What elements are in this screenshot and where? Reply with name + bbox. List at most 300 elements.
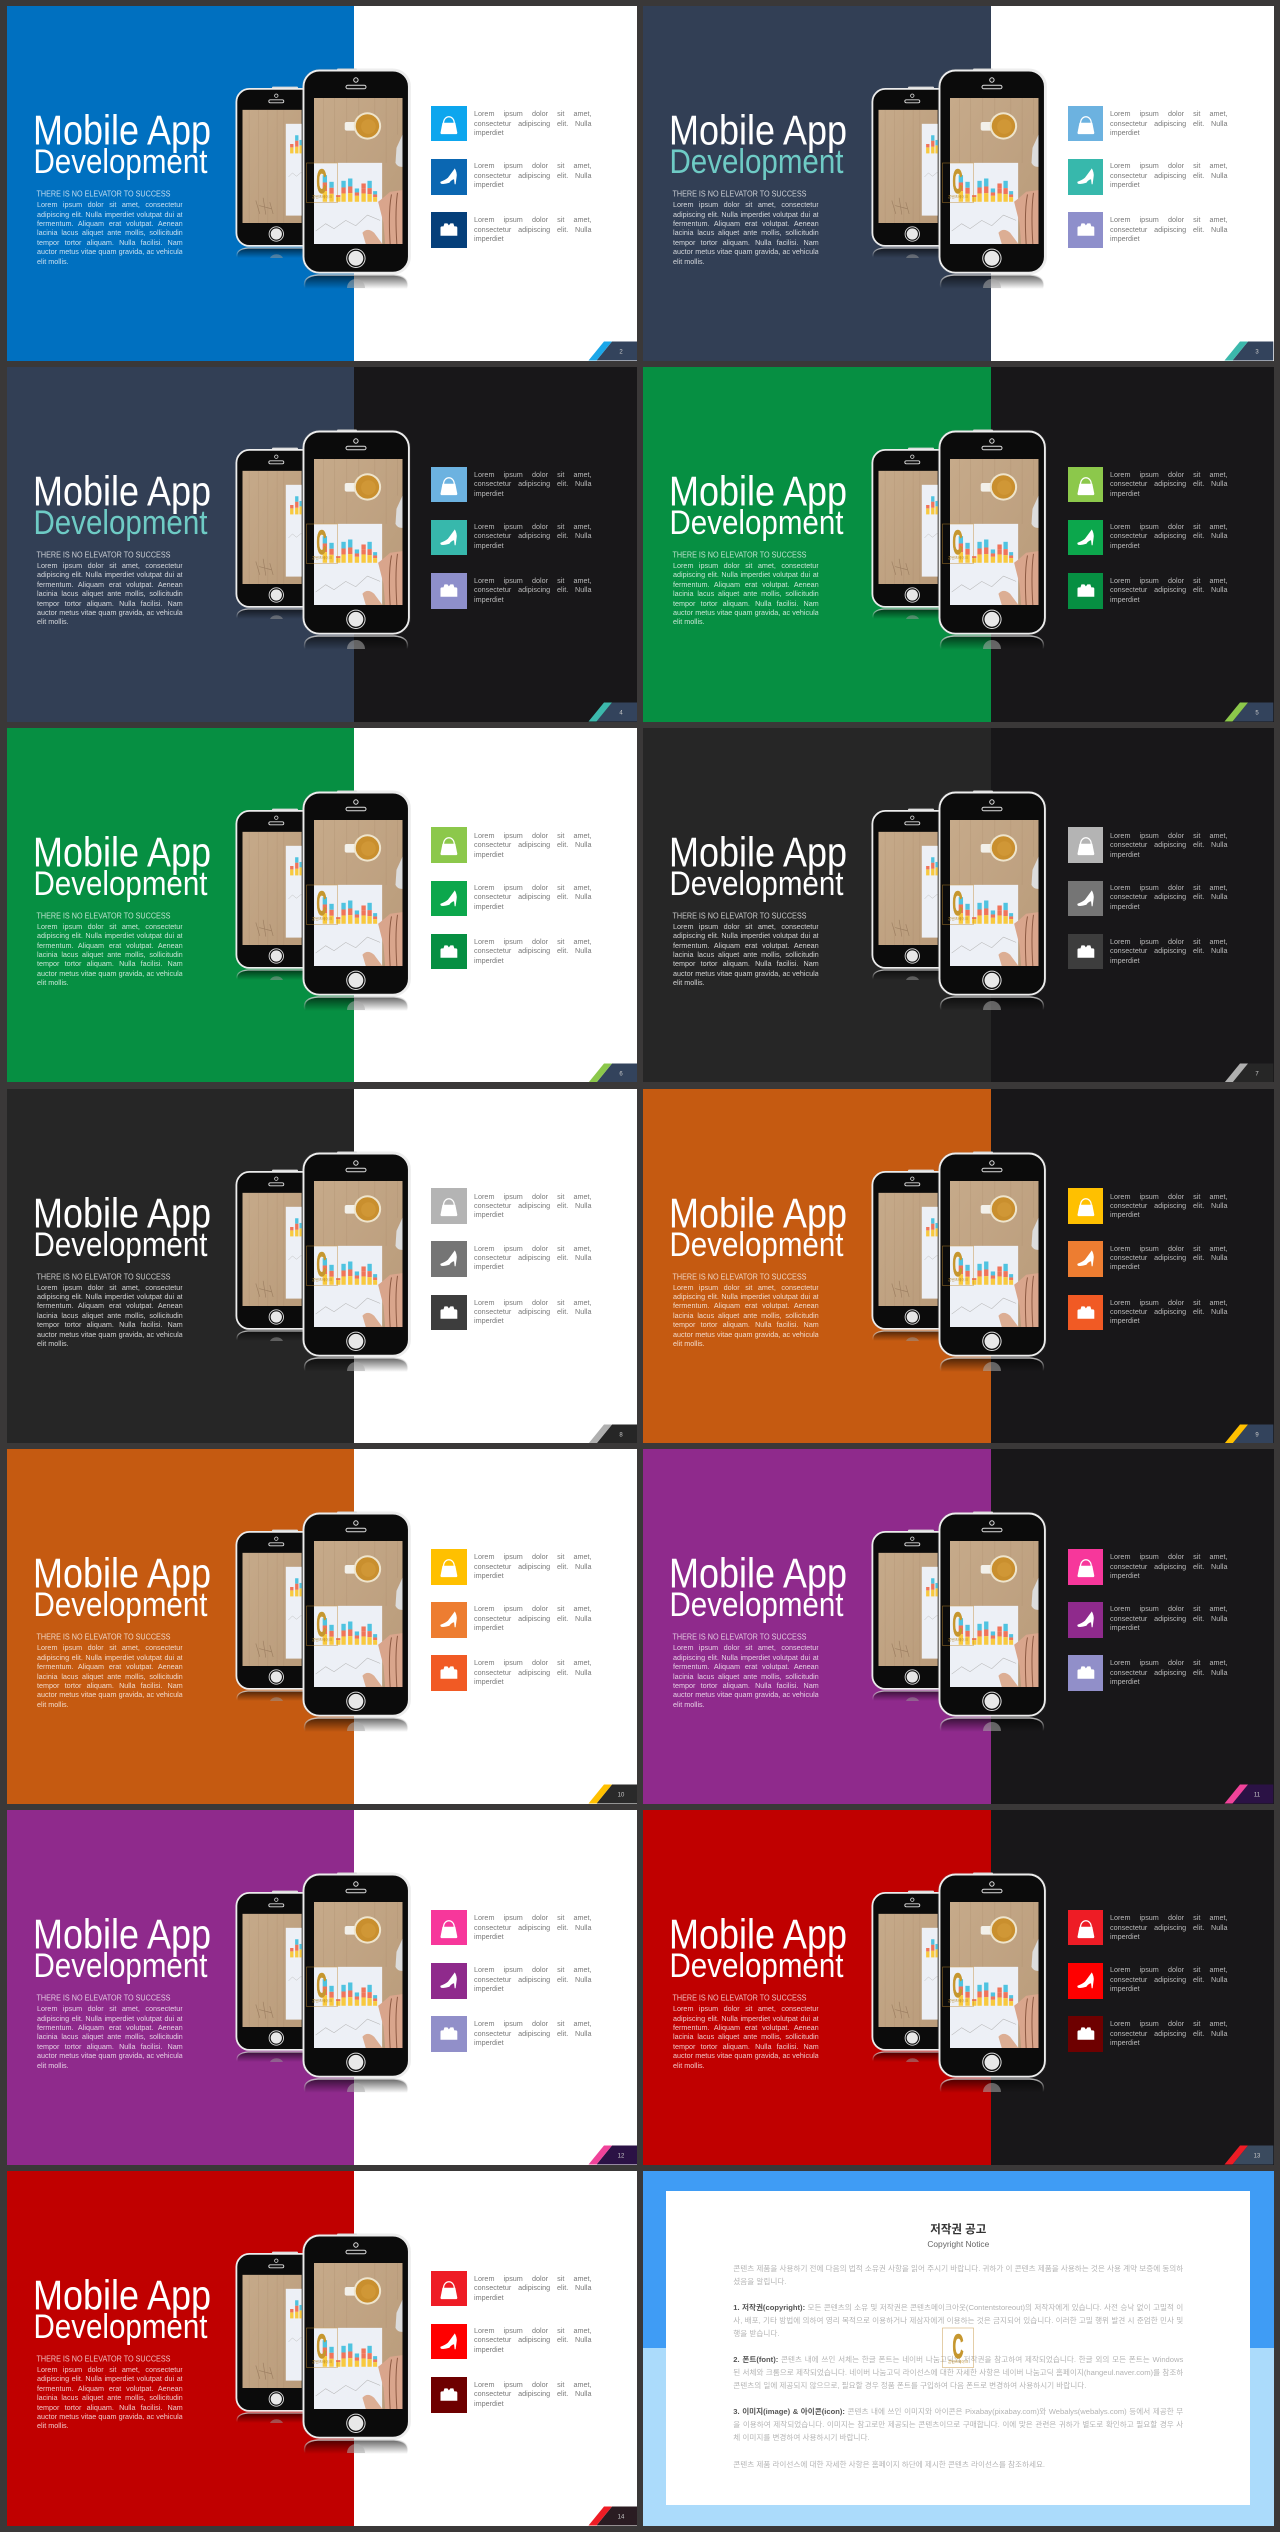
feature text 2 bbox=[1110, 161, 1228, 189]
feature text 2: imperdiet bbox=[1110, 902, 1140, 911]
page corner bbox=[643, 1089, 1274, 1443]
body paragraph: Lorem ipsum dolor sit amet, consectetur bbox=[673, 1283, 819, 1292]
body paragraph: elit mollis. bbox=[37, 2061, 68, 2070]
watermark bbox=[643, 1810, 1274, 2165]
icon: bag bbox=[431, 467, 467, 502]
title: THERE IS NO ELEVATOR TO SUCCESS bbox=[673, 1272, 807, 1281]
title bbox=[32, 107, 210, 199]
watermark: 콘텐츠메이크 bbox=[948, 1277, 969, 1282]
feature text 3: Lorem ipsum dolor sit amet, bbox=[474, 1298, 591, 1307]
page corner: 11 bbox=[1254, 1793, 1261, 1799]
icon: bag bbox=[1068, 1188, 1103, 1224]
feature text 2: Lorem ipsum dolor sit amet, bbox=[1110, 883, 1228, 892]
body paragraph: tempor tortor aliquam. Nulla facilisi. Nam bbox=[37, 1320, 182, 1329]
body paragraph: adipiscing elit. Nulla imperdiet volutpat dui at bbox=[37, 1653, 182, 1662]
watermark: 콘텐츠메이크 bbox=[312, 555, 332, 560]
body paragraph: elit mollis. bbox=[37, 2421, 68, 2430]
feature text 1: imperdiet bbox=[1110, 1932, 1140, 1941]
notice body text: 행을 받습니다. bbox=[733, 2329, 779, 2338]
body paragraph: lacinia lacus aliquet ante mollis, sollicitudin bbox=[673, 228, 819, 237]
body paragraph: Lorem ipsum dolor sit amet, consectetur bbox=[37, 1643, 182, 1652]
icon: bag bbox=[431, 1910, 467, 1945]
body paragraph: fermentum. Aliquam erat volutpat. Aenean bbox=[37, 219, 182, 228]
body paragraph: lacinia lacus aliquet ante mollis, sollicitudin bbox=[37, 1311, 182, 1320]
right panel bbox=[354, 1810, 637, 2165]
white notice card bbox=[666, 2191, 1250, 2505]
page corner bbox=[6, 1810, 637, 2165]
notice heading: 저작권 공고 bbox=[930, 2224, 986, 2236]
body paragraph: auctor metus vitae quam gravida, ac vehicula bbox=[673, 247, 819, 256]
watermark: C bbox=[316, 1606, 326, 1644]
feature text 1: Lorem ipsum dolor sit amet, bbox=[474, 1552, 591, 1561]
watermark: 콘텐츠메이크 bbox=[948, 194, 969, 199]
icon: gift bbox=[431, 1295, 467, 1330]
watermark: C bbox=[953, 1967, 963, 2005]
title: Mobile App bbox=[32, 107, 210, 154]
feature text 3 bbox=[474, 1298, 591, 1326]
feature text 1: imperdiet bbox=[1110, 1571, 1140, 1580]
feature text 3 bbox=[1110, 937, 1228, 965]
right panel bbox=[991, 728, 1274, 1082]
feature text 3: Lorem ipsum dolor sit amet, bbox=[474, 937, 591, 946]
title: Development bbox=[670, 504, 844, 542]
watermark: C bbox=[316, 885, 326, 923]
watermark: 콘텐츠메이크 bbox=[312, 916, 332, 921]
feature text 1 bbox=[474, 831, 591, 859]
watermark bbox=[643, 2171, 1274, 2526]
body paragraph: tempor tortor aliquam. Nulla facilisi. Nam bbox=[37, 238, 182, 247]
icon: bag bbox=[431, 106, 467, 141]
feature text 2: Lorem ipsum dolor sit amet, bbox=[1110, 1604, 1228, 1613]
page corner bbox=[1224, 342, 1274, 360]
icon: gift bbox=[431, 1655, 467, 1691]
body paragraph bbox=[673, 200, 819, 266]
left panel bbox=[6, 367, 354, 722]
slide 12: purple and white bbox=[6, 1810, 637, 2165]
title bbox=[643, 728, 1274, 1082]
body paragraph: tempor tortor aliquam. Nulla facilisi. Nam bbox=[37, 599, 182, 608]
body paragraph: elit mollis. bbox=[673, 1339, 705, 1348]
body paragraph: tempor tortor aliquam. Nulla facilisi. Nam bbox=[37, 2403, 182, 2412]
slide 6: green and white bbox=[7, 728, 637, 1082]
feature text 3: consectetur adipiscing elit. Nulla bbox=[1110, 585, 1228, 594]
watermark: 콘텐츠메이크 bbox=[948, 1998, 969, 2003]
feature text 3: consectetur adipiscing elit. Nulla bbox=[474, 1668, 591, 1677]
body paragraph: Lorem ipsum dolor sit amet, consectetur bbox=[673, 1643, 819, 1652]
feature text 2: consectetur adipiscing elit. Nulla bbox=[1110, 531, 1228, 540]
watermark: C bbox=[316, 1967, 326, 2005]
watermark bbox=[306, 524, 338, 564]
body paragraph: elit mollis. bbox=[673, 257, 705, 266]
watermark: 콘텐츠메이크 bbox=[948, 916, 969, 921]
body paragraph bbox=[673, 2004, 819, 2070]
body paragraph: lacinia lacus aliquet ante mollis, sollicitudin bbox=[673, 1311, 819, 1320]
body paragraph bbox=[37, 1643, 182, 1709]
phones bbox=[872, 430, 1046, 649]
page corner: 5 bbox=[1256, 710, 1260, 716]
title bbox=[32, 468, 210, 559]
phones bbox=[6, 1810, 637, 2165]
body paragraph: lacinia lacus aliquet ante mollis, sollicitudin bbox=[37, 2032, 182, 2041]
body paragraph: lacinia lacus aliquet ante mollis, sollicitudin bbox=[37, 1672, 182, 1681]
title bbox=[643, 1810, 1274, 2165]
feature text 1: consectetur adipiscing elit. Nulla bbox=[474, 840, 591, 849]
body paragraph: adipiscing elit. Nulla imperdiet volutpat dui at bbox=[37, 2014, 182, 2023]
body paragraph: Lorem ipsum dolor sit amet, consectetur bbox=[37, 1283, 182, 1292]
body paragraph: lacinia lacus aliquet ante mollis, sollicitudin bbox=[37, 228, 182, 237]
watermark: C bbox=[953, 1246, 963, 1284]
feature text 3: Lorem ipsum dolor sit amet, bbox=[1110, 215, 1228, 224]
feature text 2: imperdiet bbox=[474, 1623, 503, 1632]
slide 9: orange and black bbox=[643, 1089, 1274, 1443]
watermark: C bbox=[953, 885, 963, 923]
feature text 3: Lorem ipsum dolor sit amet, bbox=[474, 2019, 591, 2028]
watermark: C bbox=[953, 1606, 963, 1644]
watermark: 콘텐츠메이크 bbox=[948, 555, 969, 560]
title: Mobile App bbox=[32, 2272, 210, 2319]
page corner: 6 bbox=[619, 1071, 623, 1077]
notice subheading: Copyright Notice bbox=[927, 2239, 989, 2249]
icon: bag bbox=[1068, 1910, 1103, 1945]
feature text 2: Lorem ipsum dolor sit amet, bbox=[1110, 161, 1228, 170]
title: Development bbox=[670, 1947, 844, 1985]
feature text 1 bbox=[474, 1913, 591, 1941]
phones bbox=[643, 1089, 1274, 1443]
watermark: 콘텐츠메이크 bbox=[312, 2359, 332, 2364]
title: Development bbox=[33, 2308, 207, 2346]
body paragraph: adipiscing elit. Nulla imperdiet volutpat dui at bbox=[37, 570, 182, 579]
feature text 3: consectetur adipiscing elit. Nulla bbox=[1110, 2029, 1228, 2038]
icon: bag bbox=[431, 827, 467, 863]
watermark: C bbox=[316, 163, 326, 201]
feature text 1 bbox=[1110, 1192, 1228, 1220]
feature text 3: imperdiet bbox=[474, 956, 503, 965]
body paragraph bbox=[673, 1283, 819, 1348]
body paragraph: auctor metus vitae quam gravida, ac vehicula bbox=[37, 1690, 182, 1699]
slide 13: red and black bbox=[643, 1810, 1274, 2165]
feature text 1 bbox=[474, 109, 592, 137]
body paragraph bbox=[673, 561, 819, 626]
feature text 3 bbox=[1110, 215, 1228, 243]
feature text 3: imperdiet bbox=[474, 2399, 503, 2408]
notice body text bbox=[733, 2256, 1183, 2471]
feature text 3: imperdiet bbox=[1110, 1316, 1140, 1325]
body paragraph: adipiscing elit. Nulla imperdiet volutpat dui at bbox=[673, 931, 819, 940]
feature text 2: consectetur adipiscing elit. Nulla bbox=[474, 2335, 591, 2344]
feature text 1 bbox=[474, 1552, 591, 1581]
title: THERE IS NO ELEVATOR TO SUCCESS bbox=[36, 2354, 170, 2363]
feature text 2: Lorem ipsum dolor sit amet, bbox=[474, 1244, 591, 1253]
feature text 3 bbox=[1110, 1658, 1228, 1687]
body paragraph: auctor metus vitae quam gravida, ac vehicula bbox=[673, 2051, 819, 2060]
body paragraph bbox=[37, 561, 182, 626]
feature text 2: consectetur adipiscing elit. Nulla bbox=[474, 892, 591, 901]
feature text 3: imperdiet bbox=[474, 1316, 503, 1325]
feature text 3: imperdiet bbox=[474, 234, 503, 243]
feature text 2: imperdiet bbox=[474, 2345, 503, 2354]
body paragraph: elit mollis. bbox=[673, 978, 705, 987]
feature text 1: Lorem ipsum dolor sit amet, bbox=[474, 831, 591, 840]
body paragraph: lacinia lacus aliquet ante mollis, sollicitudin bbox=[37, 2393, 182, 2402]
watermark bbox=[942, 162, 974, 203]
feature text 3: Lorem ipsum dolor sit amet, bbox=[474, 576, 591, 585]
feature text 1: Lorem ipsum dolor sit amet, bbox=[1110, 831, 1228, 840]
phones bbox=[872, 68, 1047, 288]
watermark: 콘텐츠메이크 bbox=[312, 194, 332, 199]
title: Development bbox=[33, 143, 207, 181]
feature text 3: consectetur adipiscing elit. Nulla bbox=[1110, 225, 1228, 234]
icon: shoe bbox=[1068, 881, 1103, 916]
watermark: 콘텐츠메이크 bbox=[948, 2359, 969, 2364]
title: THERE IS NO ELEVATOR TO SUCCESS bbox=[673, 911, 807, 920]
notice body text: 체 이미지를 변경하여 사용하시기 바랍니다. bbox=[733, 2433, 870, 2442]
feature text 1: Lorem ipsum dolor sit amet, bbox=[474, 2274, 591, 2283]
icon: gift bbox=[1068, 573, 1103, 609]
title: Mobile App bbox=[669, 107, 847, 154]
body paragraph: Lorem ipsum dolor sit amet, consectetur bbox=[37, 200, 182, 209]
body paragraph: auctor metus vitae quam gravida, ac vehicula bbox=[37, 2051, 182, 2060]
body paragraph: tempor tortor aliquam. Nulla facilisi. Nam bbox=[673, 959, 819, 968]
icon: bag bbox=[431, 1549, 467, 1585]
title: Development bbox=[670, 143, 844, 181]
feature text 1: imperdiet bbox=[1110, 1210, 1140, 1219]
watermark: 콘텐츠메이크 bbox=[948, 1637, 969, 1642]
body paragraph bbox=[673, 922, 819, 988]
body paragraph: auctor metus vitae quam gravida, ac vehicula bbox=[673, 969, 819, 978]
body paragraph: tempor tortor aliquam. Nulla facilisi. Nam bbox=[37, 1681, 182, 1690]
body paragraph: elit mollis. bbox=[673, 617, 705, 626]
body paragraph: fermentum. Aliquam erat volutpat. Aenean bbox=[37, 2023, 182, 2032]
phones bbox=[643, 1449, 1274, 1804]
feature text 2: consectetur adipiscing elit. Nulla bbox=[474, 531, 591, 540]
icon: shoe bbox=[431, 159, 467, 195]
title bbox=[643, 1089, 1274, 1443]
body paragraph: fermentum. Aliquam erat volutpat. Aenean bbox=[673, 1301, 819, 1310]
feature text 1 bbox=[1110, 470, 1228, 498]
feature text 3: consectetur adipiscing elit. Nulla bbox=[474, 1307, 591, 1316]
body paragraph: adipiscing elit. Nulla imperdiet volutpat dui at bbox=[673, 210, 819, 219]
icon: shoe bbox=[1068, 159, 1103, 195]
title: THERE IS NO ELEVATOR TO SUCCESS bbox=[673, 1994, 807, 2003]
body paragraph: fermentum. Aliquam erat volutpat. Aenean bbox=[37, 580, 182, 589]
watermark bbox=[6, 728, 637, 1082]
notice body text: 콘텐츠 제품을 사용하기 전에 다음의 법적 소유권 사항을 읽어 주시기 바랍니다. 귀하가 이 콘텐츠 제품을 사용하는 것은 사용 계약 보증에 동의하 bbox=[733, 2264, 1183, 2273]
page corner bbox=[6, 1449, 637, 1804]
left panel bbox=[643, 367, 991, 722]
left panel bbox=[6, 1089, 354, 1443]
feature text 1: imperdiet bbox=[474, 489, 503, 498]
body paragraph bbox=[37, 2365, 182, 2431]
body paragraph: auctor metus vitae quam gravida, ac vehicula bbox=[37, 969, 182, 978]
feature text 2: consectetur adipiscing elit. Nulla bbox=[1110, 1614, 1228, 1623]
icon: bag bbox=[1068, 827, 1103, 863]
feature text 2: Lorem ipsum dolor sit amet, bbox=[474, 883, 591, 892]
feature text 3: Lorem ipsum dolor sit amet, bbox=[474, 1658, 591, 1667]
body paragraph: fermentum. Aliquam erat volutpat. Aenean bbox=[673, 219, 819, 228]
left panel bbox=[643, 1449, 991, 1804]
feature text 3: consectetur adipiscing elit. Nulla bbox=[474, 2029, 591, 2038]
icon: bag bbox=[1068, 106, 1103, 141]
body paragraph: adipiscing elit. Nulla imperdiet volutpat dui at bbox=[37, 931, 182, 940]
title: THERE IS NO ELEVATOR TO SUCCESS bbox=[673, 190, 807, 199]
feature text 1: consectetur adipiscing elit. Nulla bbox=[1110, 1923, 1228, 1932]
feature text 3 bbox=[474, 576, 592, 604]
feature text 1: Lorem ipsum dolor sit amet, bbox=[1110, 1552, 1228, 1561]
feature text 1: imperdiet bbox=[474, 1210, 503, 1219]
icon: shoe bbox=[431, 881, 467, 916]
watermark: 콘텐츠메이크 bbox=[312, 1277, 332, 1282]
feature text 3: consectetur adipiscing elit. Nulla bbox=[474, 2389, 591, 2398]
phones bbox=[236, 430, 410, 649]
page corner: 12 bbox=[617, 2154, 624, 2160]
icon: gift bbox=[1068, 212, 1103, 248]
title: Development bbox=[33, 865, 207, 903]
watermark: 콘텐츠메이크 bbox=[312, 1998, 332, 2003]
slide 8: charcoal and white bbox=[6, 1089, 637, 1443]
icon: gift bbox=[1068, 2016, 1103, 2052]
watermark bbox=[643, 1449, 1274, 1804]
watermark bbox=[6, 1089, 637, 1443]
feature text 3: consectetur adipiscing elit. Nulla bbox=[1110, 1668, 1228, 1677]
body paragraph: elit mollis. bbox=[37, 1700, 68, 1709]
icon: shoe bbox=[431, 1963, 467, 1999]
title: Mobile App bbox=[32, 1189, 210, 1236]
feature text 1: consectetur adipiscing elit. Nulla bbox=[1110, 1201, 1228, 1210]
title: Mobile App bbox=[32, 468, 210, 515]
title: Development bbox=[670, 1226, 844, 1264]
left panel bbox=[6, 1449, 354, 1804]
feature text 3: Lorem ipsum dolor sit amet, bbox=[474, 2380, 591, 2389]
body paragraph: Lorem ipsum dolor sit amet, consectetur bbox=[673, 561, 819, 570]
title: Development bbox=[33, 504, 207, 542]
body paragraph: adipiscing elit. Nulla imperdiet volutpat dui at bbox=[673, 1653, 819, 1662]
title: Development bbox=[33, 1947, 207, 1985]
left panel bbox=[643, 6, 991, 361]
phones bbox=[6, 1089, 637, 1443]
feature text 3 bbox=[474, 215, 592, 243]
watermark bbox=[6, 1449, 637, 1804]
feature text 1: Lorem ipsum dolor sit amet, bbox=[1110, 1913, 1228, 1922]
title: Development bbox=[670, 1586, 844, 1624]
watermark: C bbox=[316, 1246, 326, 1284]
feature text 3 bbox=[1110, 576, 1228, 604]
left panel bbox=[643, 1810, 991, 2165]
body paragraph: adipiscing elit. Nulla imperdiet volutpat dui at bbox=[673, 1292, 819, 1301]
watermark bbox=[942, 524, 974, 564]
title: Mobile App bbox=[669, 1911, 847, 1958]
right panel bbox=[354, 1089, 637, 1443]
body paragraph: elit mollis. bbox=[673, 1700, 705, 1709]
feature text 1 bbox=[1110, 831, 1228, 859]
title: Development bbox=[33, 1226, 207, 1264]
feature text 1: imperdiet bbox=[474, 1571, 503, 1580]
title: THERE IS NO ELEVATOR TO SUCCESS bbox=[36, 1633, 170, 1642]
feature text 1: imperdiet bbox=[1110, 128, 1140, 137]
feature text 2 bbox=[474, 1965, 591, 1993]
body paragraph: Lorem ipsum dolor sit amet, consectetur bbox=[37, 922, 182, 931]
left panel bbox=[643, 1089, 991, 1443]
feature text 2: Lorem ipsum dolor sit amet, bbox=[1110, 1244, 1228, 1253]
slide 7: charcoal and black bbox=[643, 728, 1274, 1082]
title bbox=[6, 1089, 637, 1443]
feature text 1: consectetur adipiscing elit. Nulla bbox=[474, 119, 591, 128]
page corner: 14 bbox=[617, 2514, 624, 2520]
feature text 1 bbox=[1110, 1552, 1228, 1581]
phones bbox=[236, 68, 411, 288]
icon: bag bbox=[431, 2271, 467, 2306]
left panel bbox=[6, 728, 354, 1082]
icon: gift bbox=[431, 573, 467, 609]
feature text 2: imperdiet bbox=[1110, 1623, 1140, 1632]
feature text 1: Lorem ipsum dolor sit amet, bbox=[474, 1913, 591, 1922]
feature text 3: consectetur adipiscing elit. Nulla bbox=[1110, 946, 1228, 955]
right panel bbox=[991, 6, 1274, 361]
feature text 2: Lorem ipsum dolor sit amet, bbox=[1110, 522, 1228, 531]
title: Development bbox=[33, 1586, 207, 1624]
feature text 2 bbox=[1110, 1244, 1228, 1272]
icon: shoe bbox=[431, 1241, 467, 1277]
body paragraph: auctor metus vitae quam gravida, ac vehicula bbox=[37, 608, 182, 617]
feature text 1: consectetur adipiscing elit. Nulla bbox=[474, 479, 591, 488]
body paragraph: lacinia lacus aliquet ante mollis, sollicitudin bbox=[673, 950, 819, 959]
page corner: 2 bbox=[619, 350, 623, 356]
feature text 2: Lorem ipsum dolor sit amet, bbox=[474, 1604, 591, 1613]
watermark: 콘텐츠메이크 bbox=[312, 1637, 332, 1642]
feature text 3: Lorem ipsum dolor sit amet, bbox=[1110, 1658, 1228, 1667]
body paragraph bbox=[37, 922, 182, 987]
icon: bag bbox=[1068, 1549, 1103, 1585]
feature text 1 bbox=[474, 470, 592, 498]
feature text 1: Lorem ipsum dolor sit amet, bbox=[474, 109, 591, 118]
feature text 3: consectetur adipiscing elit. Nulla bbox=[474, 946, 591, 955]
icon: gift bbox=[431, 2377, 467, 2413]
body paragraph: lacinia lacus aliquet ante mollis, sollicitudin bbox=[37, 950, 182, 959]
body paragraph: Lorem ipsum dolor sit amet, consectetur bbox=[37, 561, 182, 570]
body paragraph: Lorem ipsum dolor sit amet, consectetur bbox=[37, 2004, 182, 2013]
feature text 1: consectetur adipiscing elit. Nulla bbox=[474, 2283, 591, 2292]
icon: gift bbox=[1068, 1295, 1103, 1330]
page corner: 13 bbox=[1254, 2154, 1261, 2160]
body paragraph: tempor tortor aliquam. Nulla facilisi. Nam bbox=[673, 599, 819, 608]
page corner bbox=[6, 1089, 637, 1443]
icon: shoe bbox=[1068, 1241, 1103, 1277]
watermark bbox=[6, 1810, 637, 2165]
body paragraph: auctor metus vitae quam gravida, ac vehicula bbox=[673, 1330, 819, 1339]
page corner: 9 bbox=[1256, 1432, 1260, 1438]
right panel bbox=[991, 1449, 1274, 1804]
body paragraph: auctor metus vitae quam gravida, ac vehicula bbox=[673, 608, 819, 617]
body paragraph: fermentum. Aliquam erat volutpat. Aenean bbox=[37, 1301, 182, 1310]
page corner bbox=[588, 342, 637, 360]
page corner: 10 bbox=[617, 1793, 624, 1799]
phones bbox=[6, 2171, 637, 2526]
body paragraph: fermentum. Aliquam erat volutpat. Aenean bbox=[673, 941, 819, 950]
feature text 2: Lorem ipsum dolor sit amet, bbox=[474, 522, 591, 531]
slide 3: navy and white bbox=[643, 6, 1274, 361]
body paragraph: fermentum. Aliquam erat volutpat. Aenean bbox=[673, 2023, 819, 2032]
feature text 1: imperdiet bbox=[474, 1932, 503, 1941]
feature text 3: Lorem ipsum dolor sit amet, bbox=[1110, 937, 1228, 946]
page corner bbox=[588, 702, 637, 722]
feature text 3 bbox=[474, 1658, 591, 1687]
body paragraph: auctor metus vitae quam gravida, ac vehicula bbox=[673, 1690, 819, 1699]
feature text 1 bbox=[474, 2274, 591, 2302]
feature text 2 bbox=[1110, 522, 1228, 550]
feature text 2: Lorem ipsum dolor sit amet, bbox=[474, 161, 591, 170]
feature text 3 bbox=[1110, 2019, 1228, 2047]
feature text 1: consectetur adipiscing elit. Nulla bbox=[1110, 119, 1228, 128]
watermark: C bbox=[316, 524, 326, 562]
